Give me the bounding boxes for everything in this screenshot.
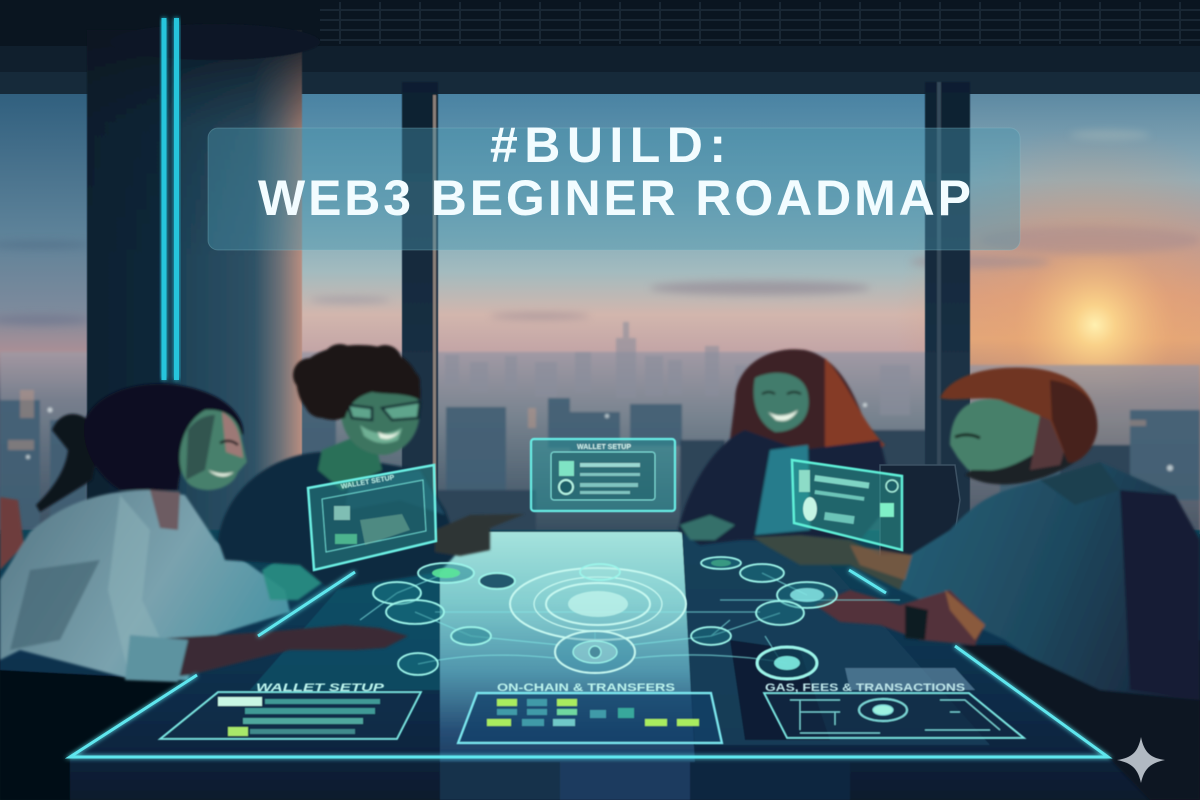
panel frame: [764, 693, 1024, 738]
panel details: [790, 699, 1000, 733]
panel label: GAS, FEES & TRANSACTIONS: [765, 682, 965, 694]
smile: [208, 470, 234, 477]
pointing arm: [752, 535, 912, 590]
panel label: ON-CHAIN & TRANSFERS: [497, 682, 675, 694]
neck and beard: [965, 420, 1078, 484]
neck: [318, 430, 382, 490]
hair: [84, 384, 243, 490]
hair: [940, 367, 1097, 463]
hologram widgets: [334, 506, 410, 545]
panel frame: [160, 692, 421, 739]
hologram widgets: [799, 470, 898, 524]
small nodes: [373, 557, 837, 679]
person: man on right: [752, 367, 1200, 800]
title panel: [208, 117, 1020, 250]
icon: sparkle watermark: [1117, 737, 1165, 783]
jacket: [678, 430, 887, 545]
panel frame: [458, 693, 722, 743]
floating hologram: wallet setup left: [308, 465, 436, 570]
connector lines: [360, 573, 900, 664]
lower forearm with hand: [135, 625, 408, 680]
eye: [220, 441, 238, 445]
hologram heading: WALLET SETUP: [341, 474, 395, 491]
blouse: [755, 445, 810, 535]
face: [180, 410, 247, 490]
hologram heading: WALLET SETUP: [577, 444, 631, 451]
window: sky and sunset: [0, 94, 1200, 534]
hub node: [555, 631, 635, 673]
shirt: [0, 490, 290, 680]
head: [341, 381, 420, 455]
eyes: [762, 392, 801, 394]
ceiling with grille: [0, 0, 1200, 94]
panel rows: [218, 697, 380, 736]
title line 2: WEB3 BEGINER ROADMAP: [258, 170, 971, 226]
neon table outline: [70, 570, 1108, 757]
table panel: on-chain and transfers: [458, 682, 722, 743]
title line 1: #BUILD:: [490, 117, 726, 173]
table top: [0, 530, 1200, 800]
floating hologram: right: [792, 460, 902, 550]
hair: [293, 344, 420, 420]
collar neck: [150, 490, 180, 530]
person: man with glasses: [218, 344, 525, 590]
panel tiles: [487, 699, 699, 726]
glasses: [348, 402, 420, 420]
hand gesture: [435, 514, 525, 556]
hand: [680, 515, 735, 540]
city skyline: [0, 322, 1200, 535]
shirt: [880, 462, 1200, 700]
neon light strips on pillar: [162, 18, 179, 380]
laptop back: [880, 465, 960, 565]
structural pillar: [87, 24, 320, 540]
left chair: [0, 497, 24, 570]
lower hand and forearm: [815, 590, 985, 645]
ponytail and bun: [36, 414, 100, 512]
person: woman on right: [678, 349, 887, 545]
person: woman on left: [0, 384, 408, 682]
central rings: [510, 568, 686, 640]
window mullions: [402, 82, 970, 542]
holographic roadmap network: [360, 557, 900, 679]
floating hologram: center: [531, 439, 675, 511]
eye: [955, 435, 980, 438]
hologram widgets: [559, 461, 640, 494]
face: [754, 373, 809, 432]
raised forearm: [262, 525, 360, 600]
torso: [218, 452, 460, 590]
panel label: WALLET SETUP: [256, 682, 385, 694]
hair: [730, 349, 885, 470]
table panel: wallet setup: [160, 682, 421, 739]
table panel: gas fees and transactions: [764, 682, 1024, 738]
face: [950, 399, 1046, 470]
